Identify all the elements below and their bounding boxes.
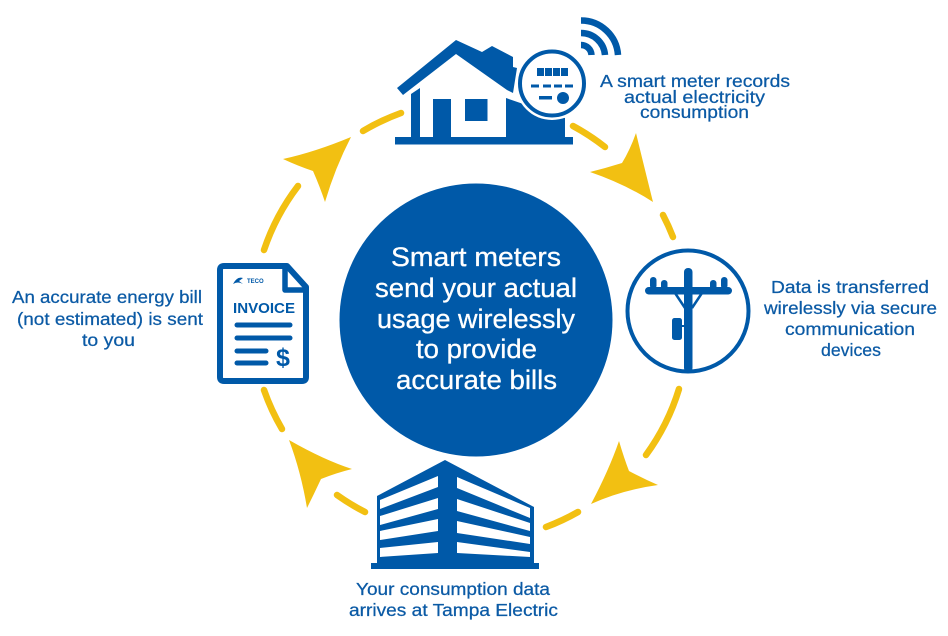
center message: to provide <box>416 334 537 364</box>
label: data transfer <box>763 277 937 360</box>
icon: house with smart meter <box>395 20 618 145</box>
meter <box>516 47 588 120</box>
label: smart meter <box>600 71 790 122</box>
label: data transfer: Data is transferred <box>771 277 929 297</box>
arrow: bottom left <box>289 440 352 508</box>
label: accurate bill: to you <box>82 330 135 350</box>
center message: send your actual <box>375 273 577 303</box>
icon: invoice: TECO <box>247 279 264 285</box>
label: smart meter: A smart meter records <box>600 71 790 91</box>
label: data arrives: Your consumption data <box>356 579 550 599</box>
window <box>465 99 488 121</box>
label: data arrives: arrives at Tampa Electric <box>349 600 558 620</box>
label: data transfer: communication <box>785 319 915 339</box>
label: data transfer: devices <box>821 340 881 360</box>
icon: invoice: INVOICE <box>233 301 295 317</box>
center message: Smart meters <box>391 242 561 272</box>
icon: office building <box>371 460 539 569</box>
label: data transfer: wirelessly via secure <box>763 298 937 318</box>
left wall <box>411 88 420 137</box>
icon: utility pole <box>628 250 748 372</box>
arrow: top left <box>283 137 351 202</box>
arrow: top right <box>590 133 653 202</box>
label: data arrives <box>349 579 558 620</box>
label: accurate bill: (not estimated) is sent <box>17 309 203 329</box>
center message: usage wirelessly <box>377 304 576 334</box>
center message: accurate bills <box>396 365 557 395</box>
label: accurate bill: An accurate energy bill <box>12 287 202 307</box>
label: smart meter: actual electricity <box>624 87 765 107</box>
label: accurate bill <box>12 287 203 350</box>
icon: invoice: $ <box>276 344 290 372</box>
center circle <box>340 184 612 456</box>
right wall <box>506 98 565 137</box>
label: smart meter: consumption <box>640 102 749 122</box>
arrow: bottom right <box>591 441 658 504</box>
door <box>433 99 451 137</box>
center message <box>375 242 577 395</box>
icon: invoice <box>220 266 306 381</box>
cycle dashes <box>264 113 679 527</box>
wifi signal <box>581 20 618 55</box>
roof <box>397 40 517 95</box>
house base <box>395 137 573 144</box>
